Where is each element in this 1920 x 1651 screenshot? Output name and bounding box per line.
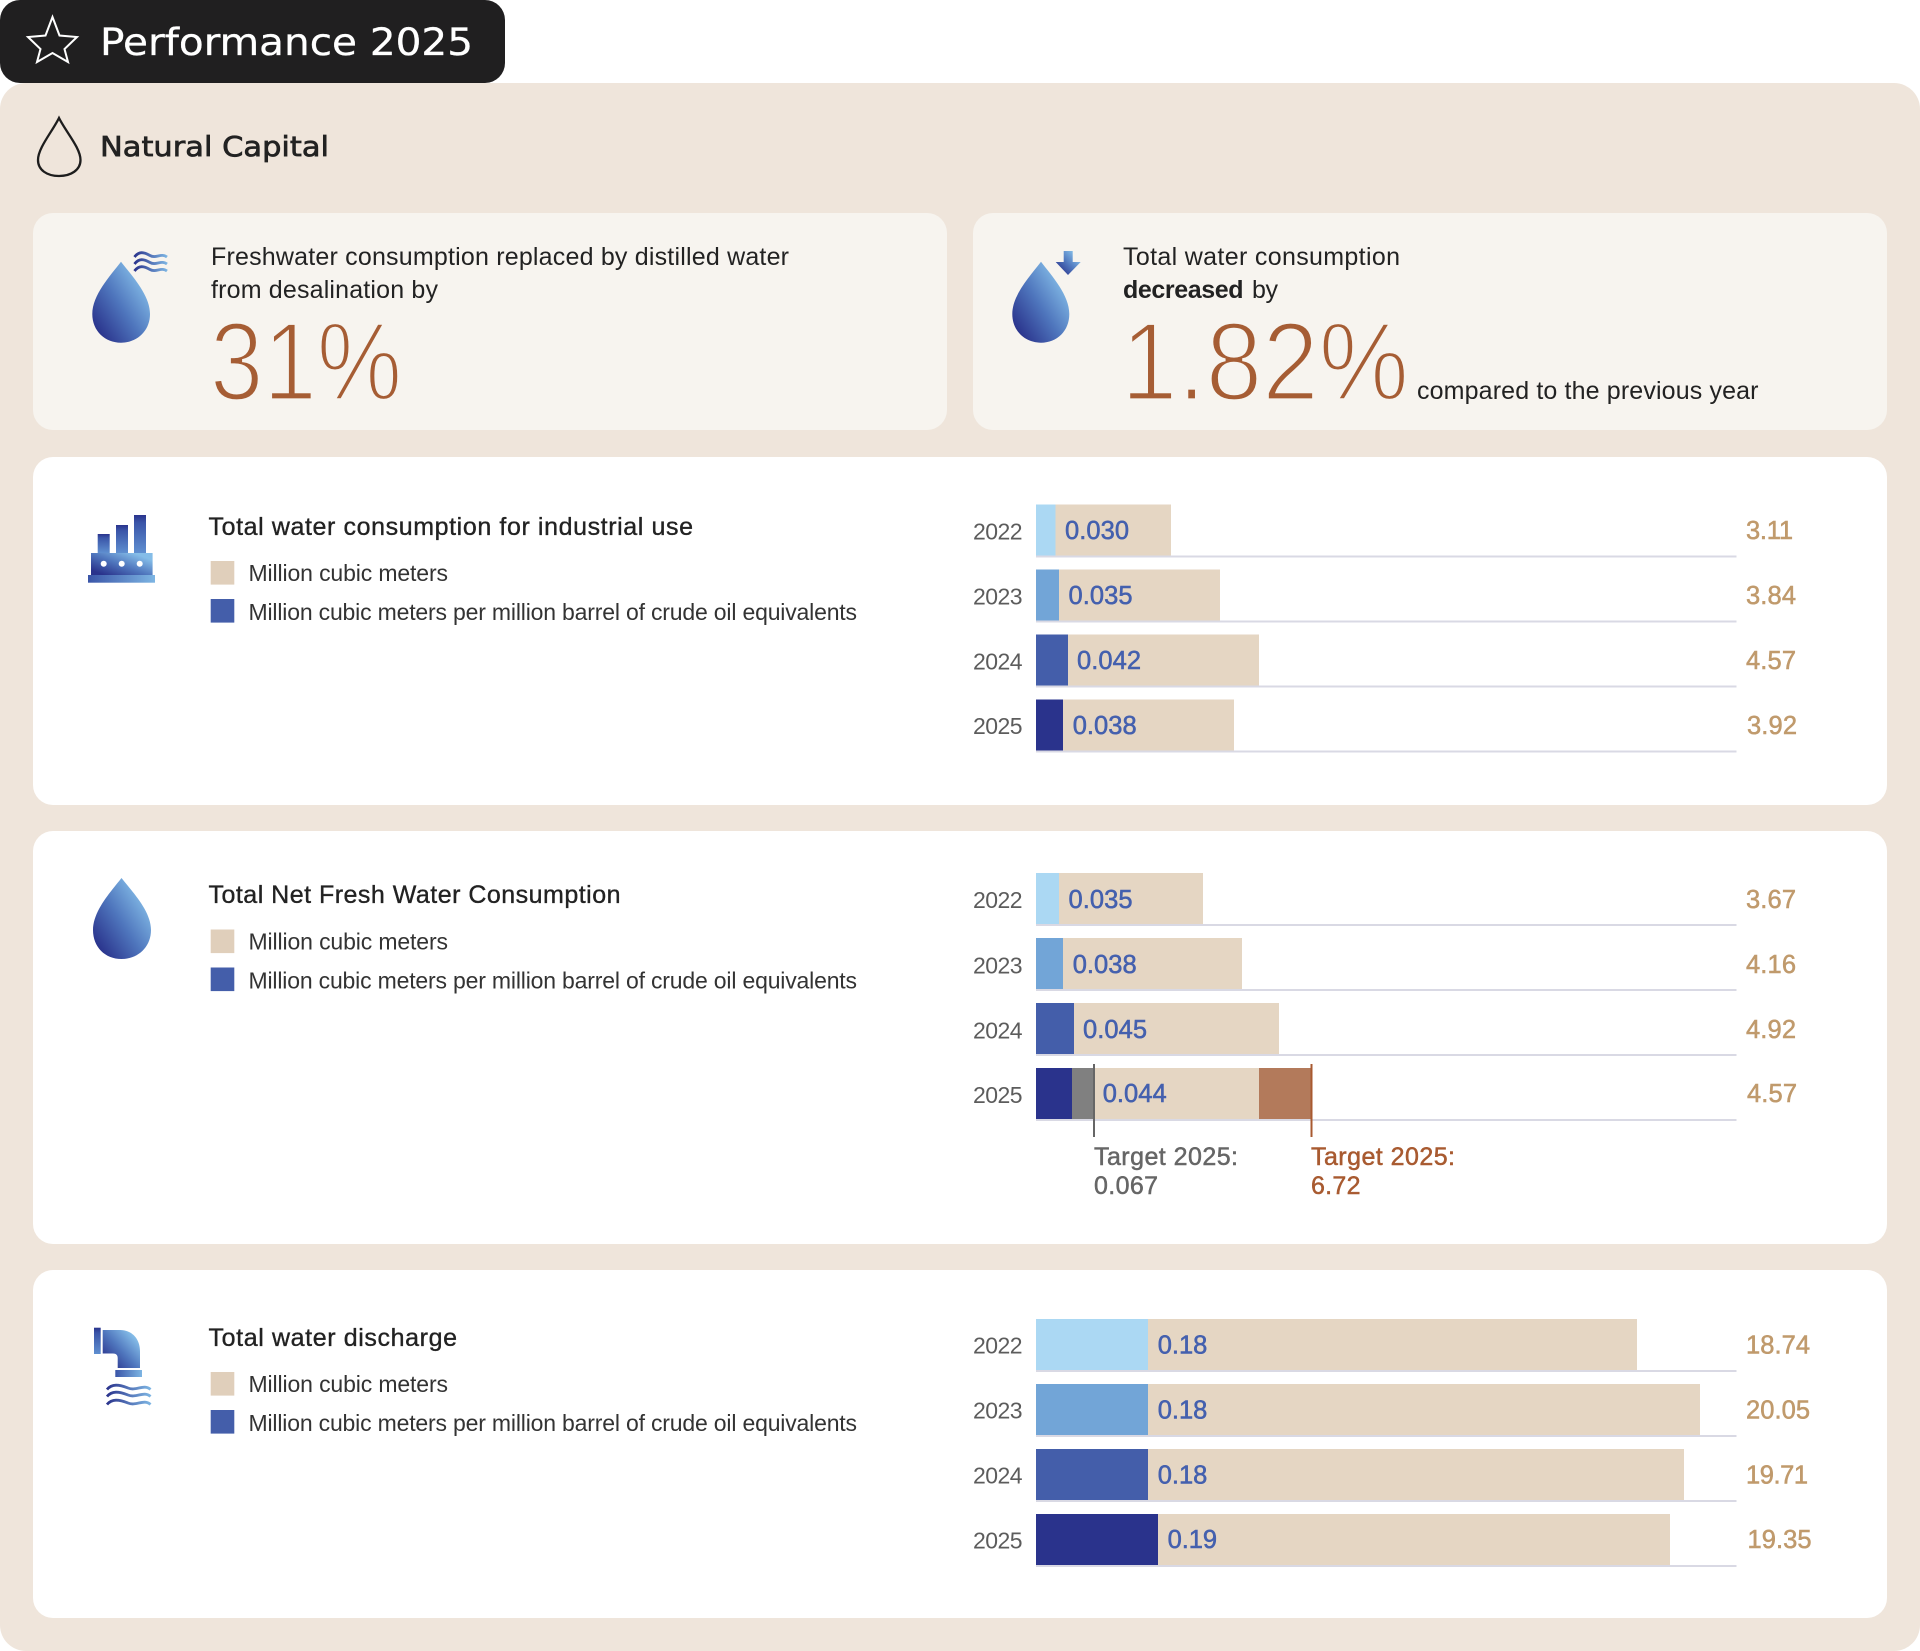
- bar chart: net fresh water consumption: 2023: [973, 952, 1022, 978]
- stat description: decreased: [1123, 276, 1244, 304]
- bar chart: net fresh water consumption: 0.035: [1068, 886, 1132, 914]
- bar chart: water discharge: 2025: [973, 1528, 1022, 1554]
- page title: Performance 2025: [100, 21, 473, 64]
- legend: Million cubic meters per million barrel of crude oil equivalents: [248, 1410, 857, 1436]
- bar chart: net fresh water consumption: 0.044: [1103, 1080, 1167, 1108]
- target marker: intensity: 0.067: [1094, 1172, 1158, 1200]
- bar chart: industrial water consumption: 4.57: [1746, 647, 1796, 675]
- bar chart: water discharge: 2022: [973, 1332, 1022, 1358]
- bar chart: water discharge: 0.18: [1158, 1332, 1207, 1360]
- card title: Total water consumption for industrial use: [208, 513, 693, 541]
- bar chart: industrial water consumption: 0.042: [1077, 647, 1141, 675]
- bar chart: net fresh water consumption: 3.67: [1746, 886, 1796, 914]
- legend: [211, 560, 857, 625]
- bar chart: industrial water consumption: 3.11: [1746, 517, 1793, 545]
- stat description: [1123, 243, 1400, 304]
- legend: [211, 928, 857, 994]
- stat value: 1.82%: 1.82%: [1121, 300, 1409, 424]
- bar chart: net fresh water consumption: 2022: [973, 887, 1022, 913]
- icon: water drop with down arrow: [1012, 251, 1081, 343]
- bar chart: industrial water consumption: 0.038: [1073, 712, 1137, 740]
- bar chart: net fresh water consumption: 2024: [973, 1018, 1023, 1044]
- section title: Natural Capital: [100, 130, 329, 163]
- card title: Total Net Fresh Water Consumption: [208, 881, 620, 909]
- legend: Million cubic meters per million barrel of crude oil equivalents: [248, 599, 857, 625]
- bar chart: net fresh water consumption: 0.038: [1073, 951, 1137, 979]
- bar chart: industrial water consumption: 2025: [973, 713, 1022, 739]
- bar chart: industrial water consumption: 2023: [973, 584, 1022, 610]
- icon: water drop: [93, 878, 151, 959]
- stat description: [211, 243, 789, 304]
- panel: total water consumption stat: [973, 213, 1887, 430]
- panel: total water discharge: [33, 1270, 1887, 1618]
- icon: water drop with waves: [92, 253, 167, 343]
- stat description: from desalination by: [211, 276, 438, 304]
- panel: total water consumption for industrial use: [33, 457, 1887, 805]
- title tab: performance 2025: [0, 0, 505, 83]
- target marker: volume: [1310, 1064, 1455, 1200]
- legend: [211, 1371, 857, 1436]
- bar chart: net fresh water consumption: 4.16: [1746, 951, 1796, 979]
- target marker: volume: 6.72: [1311, 1172, 1360, 1200]
- bar chart: net fresh water consumption: 0.045: [1083, 1016, 1147, 1044]
- target marker: intensity: [1093, 1064, 1238, 1200]
- legend: Million cubic meters: [248, 928, 448, 954]
- target marker: volume: Target 2025:: [1311, 1143, 1455, 1171]
- bar chart: water discharge: 0.19: [1168, 1526, 1217, 1554]
- bar chart: industrial water consumption: 0.035: [1068, 582, 1132, 610]
- icon: star: [28, 17, 77, 62]
- bar chart: water discharge: [973, 1319, 1812, 1567]
- bar chart: industrial water consumption: 3.92: [1747, 712, 1797, 740]
- legend: Million cubic meters per million barrel of crude oil equivalents: [248, 968, 857, 994]
- bar chart: water discharge: 18.74: [1746, 1332, 1810, 1360]
- panel: total net fresh water consumption: [33, 831, 1887, 1244]
- bar chart: industrial water consumption: [973, 504, 1797, 752]
- bar chart: industrial water consumption: 3.84: [1746, 582, 1796, 610]
- bar chart: water discharge: 19.35: [1748, 1526, 1812, 1554]
- bar chart: net fresh water consumption: [973, 873, 1797, 1200]
- stat note: compared to the previous year: [1417, 377, 1758, 405]
- icon: discharge pipe: [94, 1328, 150, 1404]
- bar chart: water discharge: 2023: [973, 1398, 1022, 1424]
- bar chart: net fresh water consumption: 4.92: [1746, 1016, 1796, 1044]
- panel: desalination stat: [33, 213, 947, 430]
- bar chart: industrial water consumption: 2024: [973, 648, 1023, 674]
- legend: Million cubic meters: [248, 1371, 448, 1397]
- stat description: by: [1252, 276, 1278, 304]
- stat description: Total water consumption: [1123, 243, 1400, 271]
- stat value: 31%: 31%: [210, 300, 402, 424]
- bar chart: net fresh water consumption: 2025: [973, 1082, 1022, 1108]
- stat description: Freshwater consumption replaced by distilled water: [211, 243, 789, 271]
- heading: natural capital: [38, 118, 329, 176]
- icon: outline water drop: [38, 118, 80, 176]
- bar chart: industrial water consumption: 2022: [973, 518, 1022, 544]
- legend: Million cubic meters: [248, 560, 448, 586]
- bar chart: water discharge: 0.18: [1158, 1462, 1207, 1490]
- target marker: intensity: Target 2025:: [1094, 1143, 1238, 1171]
- bar chart: water discharge: 20.05: [1746, 1396, 1810, 1424]
- bar chart: industrial water consumption: 0.030: [1065, 517, 1129, 545]
- card title: Total water discharge: [208, 1324, 457, 1352]
- bar chart: net fresh water consumption: 4.57: [1747, 1080, 1797, 1108]
- bar chart: water discharge: 0.18: [1158, 1396, 1207, 1424]
- icon: factory: [88, 515, 155, 583]
- bar chart: water discharge: 2024: [973, 1462, 1023, 1488]
- bar chart: water discharge: 19.71: [1746, 1462, 1808, 1490]
